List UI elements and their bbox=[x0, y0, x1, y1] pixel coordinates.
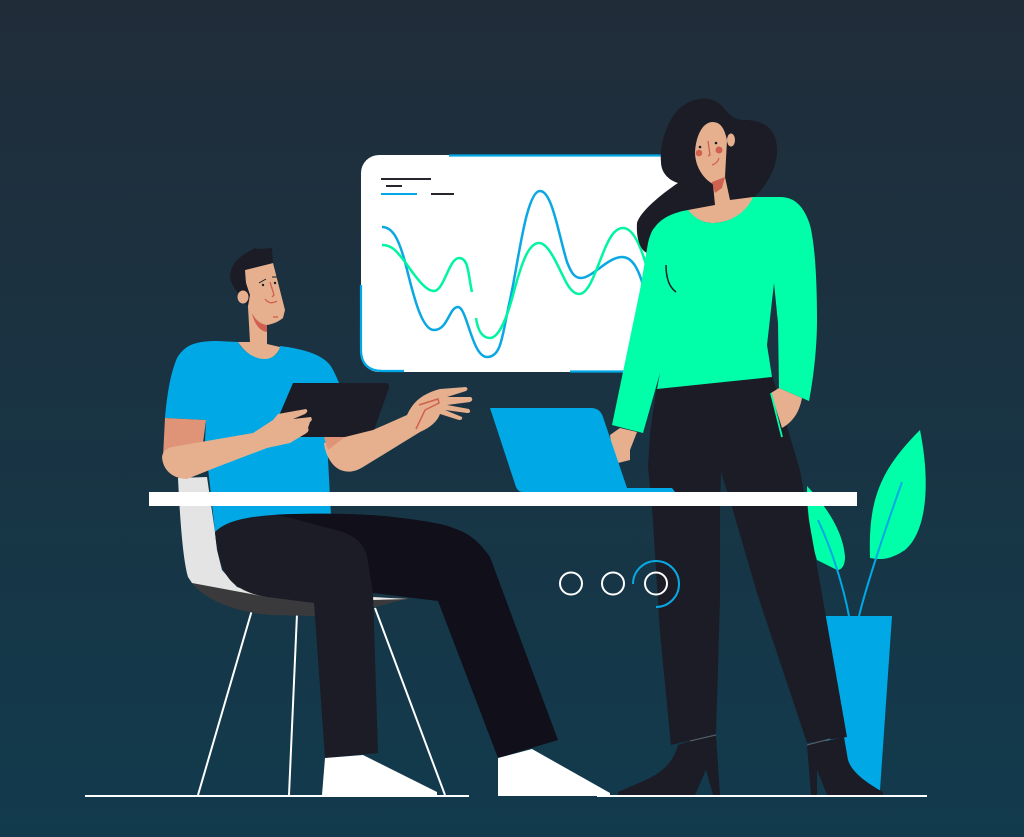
woman pocket hand bbox=[771, 388, 802, 428]
man bbox=[162, 248, 610, 796]
board legend lines bbox=[381, 179, 454, 194]
table top bbox=[149, 492, 857, 506]
chair seat bbox=[192, 583, 410, 616]
progress dots bbox=[560, 561, 679, 607]
man near leg bbox=[215, 515, 378, 758]
sweater fold bbox=[666, 265, 676, 292]
floor line bbox=[85, 795, 927, 797]
seat highlight bbox=[373, 597, 408, 600]
woman ear bbox=[727, 134, 735, 146]
panel: chart board bbox=[361, 155, 680, 372]
table bbox=[149, 408, 857, 506]
leaves bbox=[870, 430, 926, 559]
man far leg bbox=[273, 514, 558, 758]
woman boots bbox=[618, 735, 720, 795]
boot cuffs bbox=[690, 735, 830, 745]
man shirt bbox=[165, 341, 342, 532]
woman sweater bbox=[612, 197, 817, 433]
man neck and face bbox=[238, 263, 285, 359]
arm shadow bbox=[324, 437, 345, 450]
woman cheeks bbox=[696, 150, 702, 156]
stems bbox=[818, 482, 902, 616]
woman face details bbox=[708, 141, 719, 165]
man hair bbox=[230, 248, 273, 306]
chair bbox=[178, 477, 445, 795]
chair back bbox=[178, 477, 267, 597]
woman neck shadow bbox=[712, 177, 725, 193]
man right arm and hand bbox=[324, 387, 472, 472]
woman bbox=[610, 98, 883, 795]
woman face and neck bbox=[688, 122, 753, 223]
man neck shadow bbox=[252, 313, 267, 332]
tablet bbox=[278, 383, 389, 437]
laptop bbox=[490, 408, 675, 492]
man face details bbox=[265, 282, 278, 317]
woman left hand bbox=[610, 428, 637, 463]
plant bbox=[807, 430, 926, 790]
pot bbox=[825, 616, 892, 790]
man shoes bbox=[322, 755, 437, 795]
chair legs bbox=[198, 608, 445, 795]
woman trousers bbox=[648, 375, 847, 745]
man ear bbox=[238, 290, 248, 304]
hand lines bbox=[416, 399, 439, 429]
line chart: green series bbox=[382, 228, 647, 338]
woman hair bbox=[637, 98, 777, 253]
pocket line bbox=[771, 393, 782, 437]
man inner sleeve bbox=[163, 418, 206, 457]
line chart: blue series bbox=[382, 191, 643, 357]
man left arm and hand bbox=[162, 409, 312, 479]
